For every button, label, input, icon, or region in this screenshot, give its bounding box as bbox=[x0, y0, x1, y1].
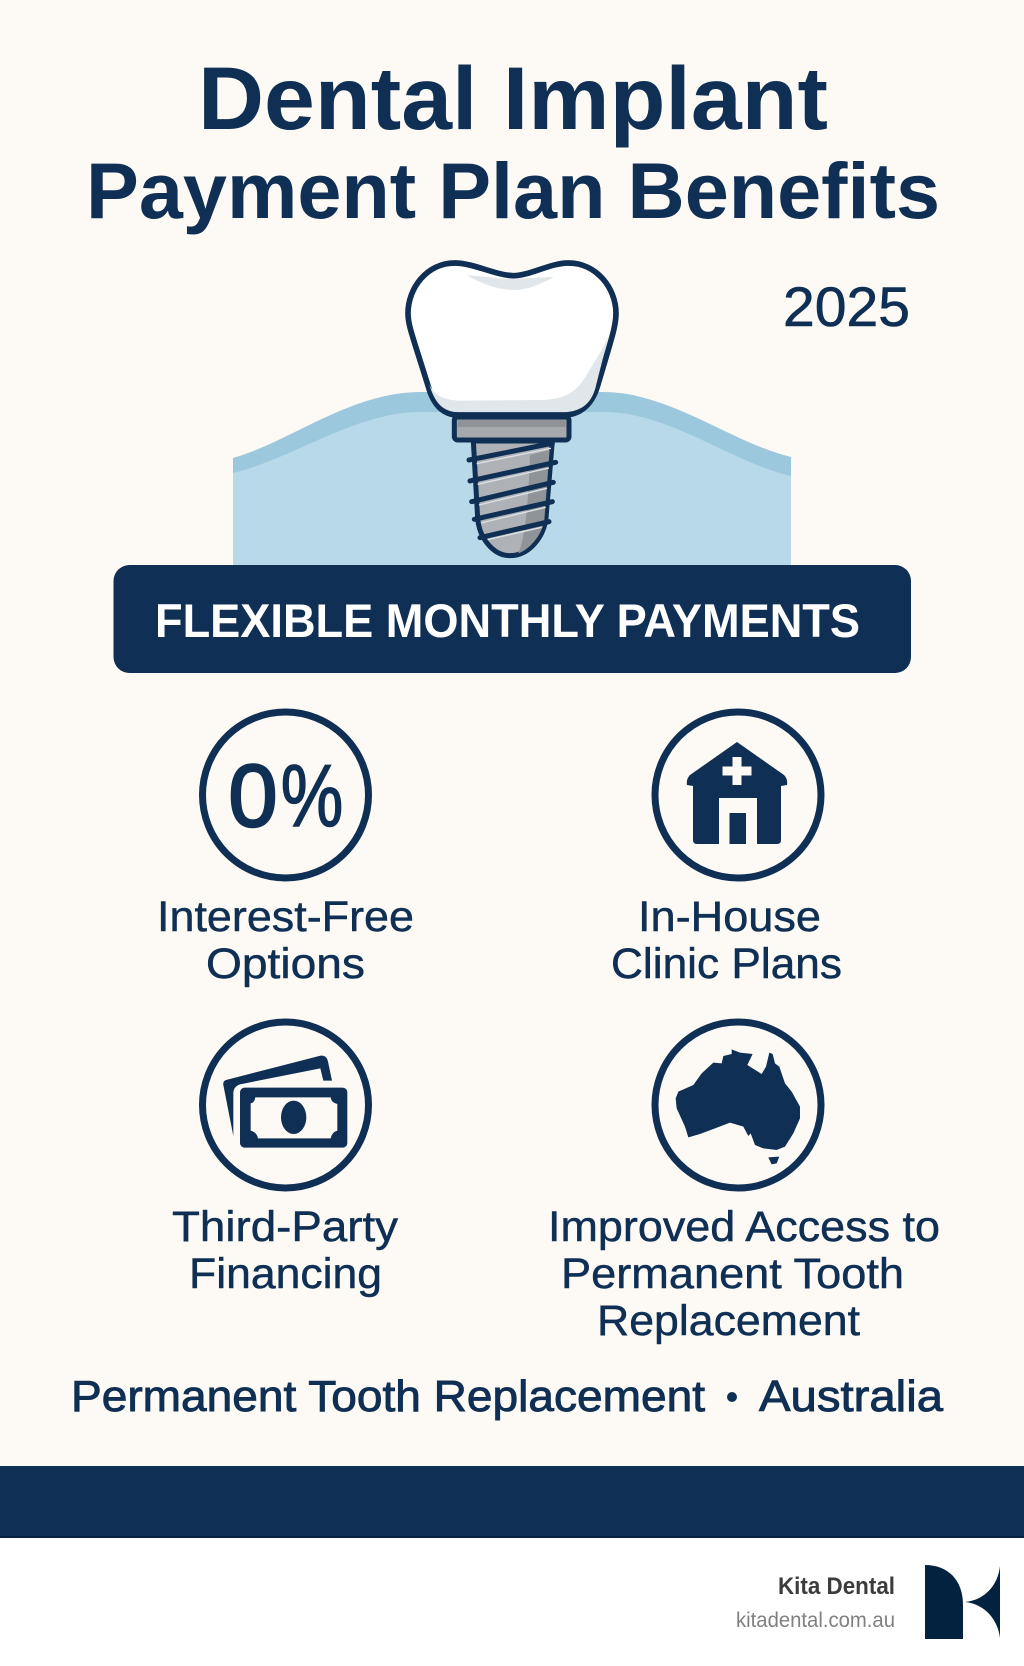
item: in-house clinic plans bbox=[611, 712, 842, 988]
screw shading bbox=[518, 450, 550, 553]
note window bbox=[251, 1097, 337, 1138]
abutment shade bbox=[458, 420, 566, 427]
illustration: dental implant in gum bbox=[233, 263, 791, 565]
label bbox=[548, 1203, 940, 1345]
crown shape bbox=[408, 263, 616, 415]
label: Replacement bbox=[597, 1297, 860, 1345]
brand name: Kita Dental bbox=[778, 1573, 895, 1600]
title bbox=[86, 48, 940, 235]
icon: 0 percent: 0 bbox=[228, 746, 277, 845]
item: third-party financing bbox=[172, 1022, 399, 1298]
tagline bbox=[71, 1372, 944, 1421]
label bbox=[157, 893, 414, 988]
note portrait bbox=[281, 1101, 306, 1134]
icon: 0 percent: % bbox=[281, 746, 343, 845]
label: Third-Party bbox=[172, 1203, 399, 1251]
item: improved access bbox=[548, 1022, 940, 1345]
crown shading bbox=[429, 337, 608, 412]
website: kitadental.com.au bbox=[736, 1609, 895, 1632]
crown bbox=[408, 263, 616, 415]
label: Improved Access to bbox=[548, 1203, 940, 1251]
gum body bbox=[233, 412, 791, 565]
navy footer bar bbox=[0, 1466, 1024, 1538]
implant abutment and screw bbox=[454, 417, 569, 556]
crown highlight bbox=[467, 275, 554, 290]
title: Payment Plan Benefits bbox=[86, 146, 940, 235]
label: Clinic Plans bbox=[611, 940, 842, 988]
label: Options bbox=[206, 940, 365, 988]
icon: 0 percent bbox=[202, 712, 368, 878]
item: interest-free options bbox=[157, 712, 414, 988]
icon: banknotes bbox=[202, 1022, 368, 1188]
label bbox=[611, 893, 842, 988]
abutment bbox=[454, 417, 569, 440]
thread highlights bbox=[477, 448, 551, 540]
year label: 2025 bbox=[783, 275, 910, 338]
mainland bbox=[676, 1049, 800, 1150]
logo bbox=[925, 1565, 1000, 1639]
label: Financing bbox=[189, 1250, 382, 1298]
screw body bbox=[473, 441, 552, 556]
icon: clinic building bbox=[655, 712, 821, 878]
label: Permanent Tooth bbox=[561, 1250, 904, 1298]
label: In-House bbox=[638, 893, 821, 941]
banner bbox=[114, 565, 911, 673]
title: Dental Implant bbox=[198, 48, 828, 148]
tagline: Australia bbox=[759, 1372, 944, 1421]
Tasmania bbox=[768, 1157, 779, 1164]
banner: FLEXIBLE MONTHLY PAYMENTS bbox=[155, 594, 860, 647]
gum tissue bbox=[233, 392, 791, 565]
label bbox=[172, 1203, 399, 1298]
screw threads bbox=[469, 443, 556, 538]
icon: map of Australia bbox=[655, 1022, 821, 1188]
footer brand panel bbox=[0, 1538, 1024, 1666]
tagline: Permanent Tooth Replacement bbox=[71, 1372, 705, 1421]
front note bbox=[240, 1088, 347, 1148]
back note bbox=[223, 1056, 332, 1136]
label: Interest-Free bbox=[157, 893, 414, 941]
